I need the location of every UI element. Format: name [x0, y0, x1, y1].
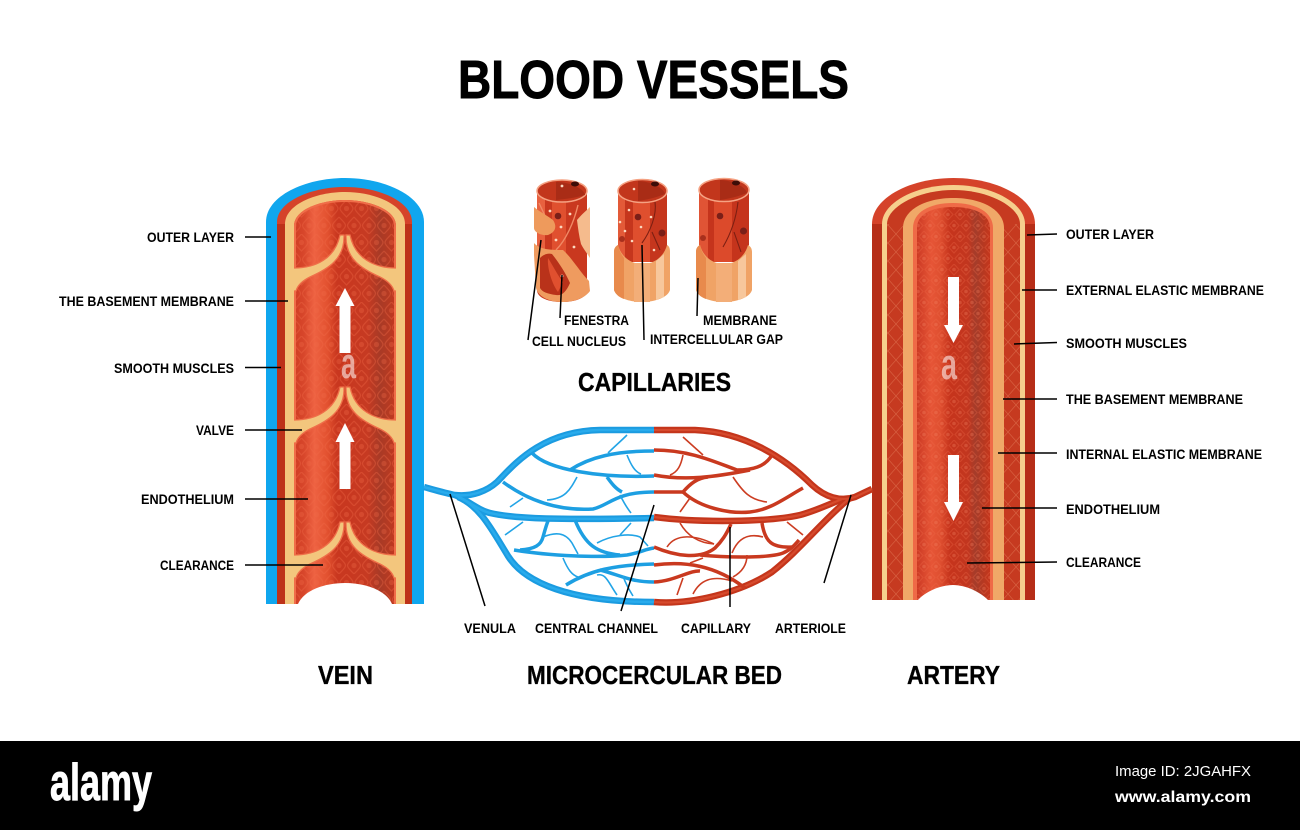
leader lines: vein: [245, 237, 323, 565]
label smooth muscles: SMOOTH MUSCLES: [114, 361, 234, 376]
vein basement membrane: [285, 192, 405, 604]
label clearance: CLEARANCE: [1066, 555, 1141, 570]
artery lumen cap: [918, 585, 988, 600]
leader lines: capillaries: [528, 240, 698, 340]
artery smooth muscle: [887, 190, 1020, 600]
blue main vessels: [424, 430, 654, 602]
artery basement membrane: [903, 198, 1004, 600]
capillary 1 right flap: [577, 207, 590, 258]
panel: vein cross-section: [266, 178, 424, 604]
footer website: www.alamy.com: [1114, 789, 1251, 806]
label arteriole: ARTERIOLE: [775, 621, 846, 636]
capillary 2 sleeve: [614, 245, 670, 302]
footer background: [0, 741, 1300, 830]
vein arrow up 2: [336, 423, 354, 489]
footer bar: [0, 741, 1300, 830]
capillary 3 tube: [699, 178, 749, 262]
label membrane: MEMBRANE: [703, 313, 777, 328]
bed labels: [464, 621, 846, 636]
capillary 1 opening: [540, 254, 570, 295]
vein smooth muscle wall: [277, 187, 412, 604]
vein left lumen cap: [298, 583, 392, 604]
capillary 2 tube: [618, 179, 667, 262]
label basement membrane: THE BASEMENT MEMBRANE: [59, 294, 234, 309]
artery outer edge shade: [872, 224, 1035, 600]
blue thin capillaries: [505, 435, 648, 596]
label clearance: CLEARANCE: [160, 558, 234, 573]
artery endothelium lumen: [917, 205, 990, 600]
chart: microcirculatory bed venous side: [424, 430, 654, 602]
red branch vessels: [654, 450, 803, 588]
vein valve 1: [285, 235, 405, 291]
vein labels: [59, 230, 234, 573]
artery internal membrane: [913, 203, 993, 600]
capillary 3 sleeve: [696, 245, 752, 302]
label valve: VALVE: [196, 423, 234, 438]
capillary 1 lower sleeve: [534, 243, 590, 302]
vein outer layer: [266, 178, 424, 604]
capillary 1 upper flap: [534, 207, 555, 235]
label smooth muscles: SMOOTH MUSCLES: [1066, 336, 1187, 351]
blue branch vessels: [503, 451, 654, 585]
heading artery: ARTERY: [907, 660, 1000, 690]
label capillary: CAPILLARY: [681, 621, 751, 636]
label fenestra: FENESTRA: [564, 313, 629, 328]
label intercellular gap: INTERCELLULAR GAP: [650, 332, 783, 347]
label endothelium: ENDOTHELIUM: [1066, 502, 1160, 517]
red main highlights: [654, 430, 872, 602]
vein valve 3: [285, 522, 405, 578]
heading capillaries: CAPILLARIES: [578, 367, 731, 397]
vein wall edge strips: [277, 224, 412, 604]
label central channel: CENTRAL CHANNEL: [535, 621, 658, 636]
capillary 3 membrane: [696, 178, 752, 302]
label venula: VENULA: [464, 621, 516, 636]
label cell nucleus: CELL NUCLEUS: [532, 334, 626, 349]
artery arrow down 1: [944, 277, 963, 343]
watermark letter vein: a: [341, 339, 356, 388]
vein arrow up 1: [336, 288, 354, 353]
artery labels: [1066, 227, 1264, 570]
artery arrow down 2: [944, 455, 963, 521]
panel: capillaries illustration: [534, 178, 752, 302]
capillary 2 intercellular gap: [614, 179, 670, 302]
artery outer layer: [872, 178, 1035, 600]
label endothelium: ENDOTHELIUM: [141, 492, 234, 507]
label external elastic membrane: EXTERNAL ELASTIC MEMBRANE: [1066, 283, 1264, 298]
panel: artery cross-section: [872, 178, 1035, 600]
red thin capillaries: [667, 437, 803, 595]
leader lines: artery: [967, 234, 1057, 563]
watermark letter artery: a: [941, 340, 957, 389]
capillary 1 fenestrated torn: [534, 180, 590, 302]
capillary labels: [532, 313, 783, 349]
label outer layer: OUTER LAYER: [1066, 227, 1154, 242]
footer image id: Image ID: 2JGAHFX: [1115, 763, 1251, 780]
label basement membrane: THE BASEMENT MEMBRANE: [1066, 392, 1243, 407]
chart: microcirculatory bed arterial side: [654, 430, 872, 602]
leader lines: microcirculatory bed: [450, 494, 851, 611]
label internal elastic membrane: INTERNAL ELASTIC MEMBRANE: [1066, 447, 1262, 462]
vein endothelium lumen: [294, 198, 396, 604]
footer logo: alamy: [50, 754, 152, 812]
heading vein: VEIN: [318, 660, 373, 690]
artery muscle weave: [887, 224, 1020, 600]
label outer layer: OUTER LAYER: [147, 230, 234, 245]
vein valve 2: [285, 387, 405, 443]
blue main highlights: [424, 430, 654, 602]
red main vessels: [654, 430, 872, 602]
title: BLOOD VESSELS: [458, 50, 849, 110]
capillary 1 tube: [537, 180, 587, 302]
heading microcercular bed: MICROCERCULAR BED: [527, 660, 782, 690]
artery external elastic membrane: [882, 185, 1025, 600]
vein membrane strips over valves: [284, 224, 406, 604]
